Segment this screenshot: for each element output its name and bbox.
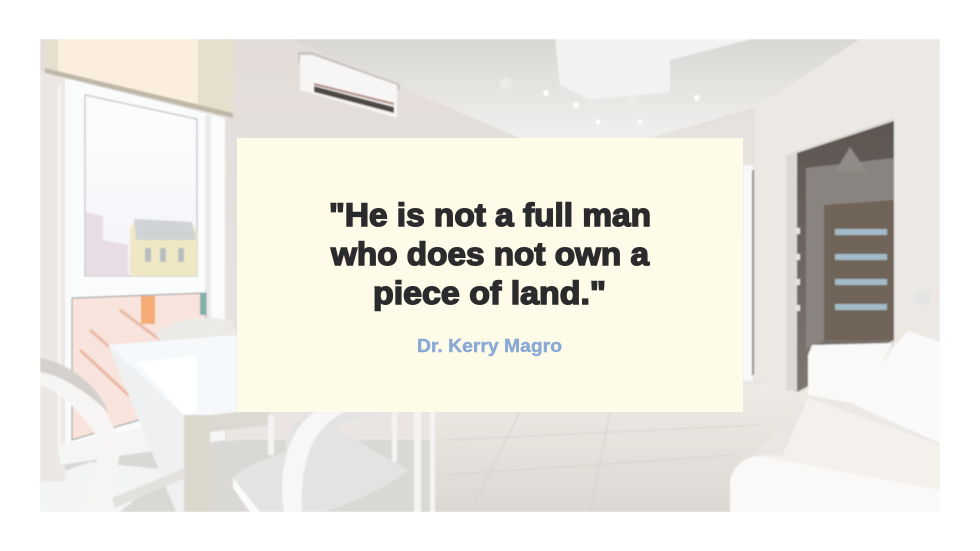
ceiling [426,40,855,138]
quote text: who does not own a [330,236,649,272]
quote text: piece of land." [373,275,606,311]
infographic canvas [40,39,940,512]
photo: bright apartment interior [40,39,940,512]
floor tile seams [448,412,759,472]
floor left [40,440,430,512]
quote author: Dr. Kerry Magro [417,336,562,356]
chair behind table [156,317,225,342]
pendant lamp [840,147,860,166]
dining table [108,335,270,512]
quote card [237,138,743,412]
ceiling recess [555,39,752,100]
far wall by fridge [650,112,755,380]
buildings outside [86,212,197,276]
light switch [915,291,930,305]
ceiling spot lights [500,78,700,124]
left chair [40,358,185,512]
door opening [786,118,894,392]
corridor wall [806,158,894,350]
quote text: "He is not a full man [329,197,651,233]
inner door [824,200,894,340]
quote text [329,197,651,311]
centre chair [233,412,408,512]
air conditioner [298,52,400,118]
fridge [743,165,753,381]
far chair legs [268,412,435,512]
hinges [796,228,800,311]
sofa [730,331,940,512]
back wall [40,39,804,457]
door glass panels [835,229,887,310]
window bottom sill [60,430,225,465]
floor [435,449,755,512]
right wall [756,40,940,258]
sofa pillow [855,331,940,443]
window frame [65,78,225,458]
upper window glass [85,95,197,276]
roller blind [45,39,233,118]
lower window glass [72,293,206,440]
